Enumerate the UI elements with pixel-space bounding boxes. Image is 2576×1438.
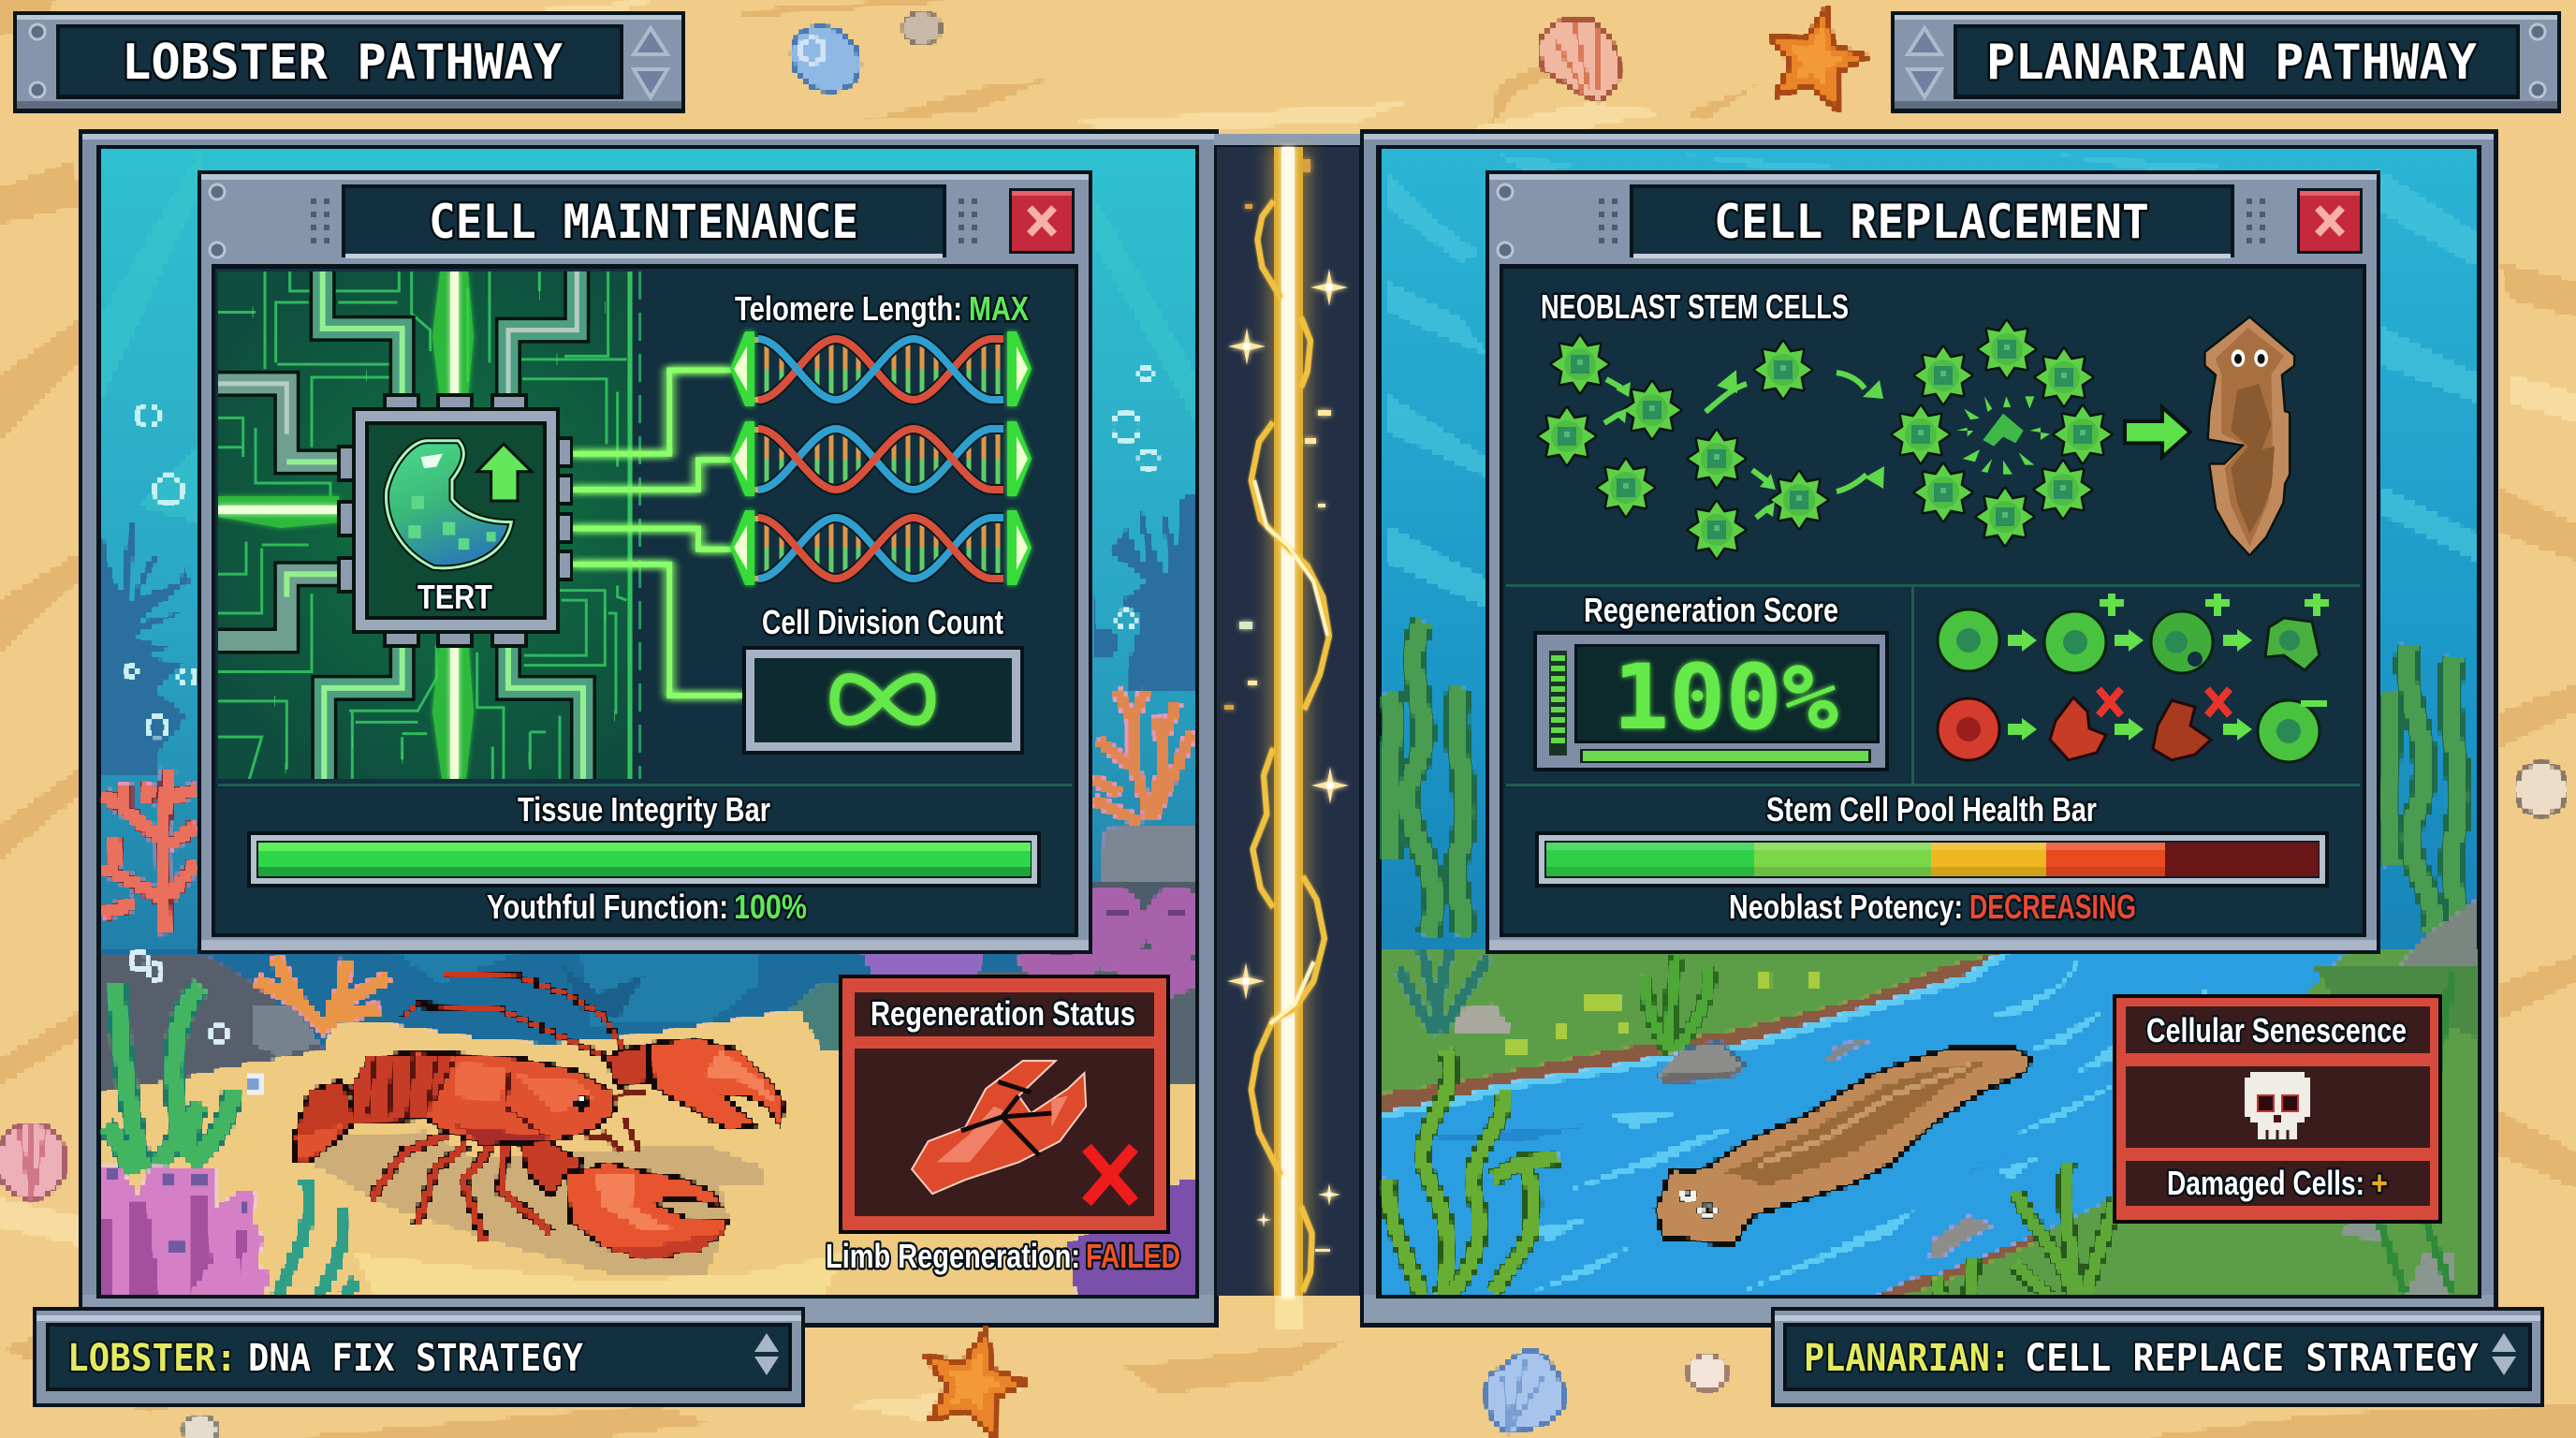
- stem cell pool health bar: [1535, 831, 2329, 888]
- window: cell replacement: [1486, 170, 2380, 954]
- seaweed sides: [1388, 621, 2459, 936]
- lightning bolt core: [1281, 147, 1295, 1299]
- water ripples: [1526, 960, 2229, 1294]
- window: cell maintenance: [198, 170, 1092, 954]
- telomere label: Telomere Length:: [735, 289, 962, 328]
- pebble: [903, 12, 941, 44]
- regeneration score display: 100%: [1613, 645, 1838, 750]
- purple coral right: [1018, 886, 1204, 1295]
- limb regeneration readout: FAILED: [1086, 1237, 1180, 1275]
- brown shore: [1380, 950, 2049, 1112]
- skull icon: [2245, 1072, 2310, 1139]
- damaged cell progression: [1938, 689, 2327, 762]
- gray rock right side: [788, 824, 1195, 1085]
- callout: cellular senescence: [2113, 994, 2442, 1224]
- pink coral: [100, 1166, 272, 1297]
- underwater background: [101, 149, 1195, 949]
- water with stripes: [1380, 149, 2478, 1295]
- starfish bottom: [912, 1317, 1036, 1438]
- regeneration score label: Regeneration Score: [1584, 591, 1838, 629]
- teal seaweed: [277, 1180, 357, 1297]
- telomere connections: [571, 370, 743, 696]
- footer: planarian strategy: PLANARIAN:: [1804, 1337, 2011, 1380]
- red coral: [103, 768, 197, 934]
- kidney icon: [387, 441, 511, 568]
- metal pipes: [218, 271, 583, 782]
- sparkles: [1224, 159, 1349, 1252]
- scroll arrows: [2492, 1333, 2516, 1375]
- header: lobster pathway: [13, 11, 685, 113]
- bank and river scene: [1380, 950, 2511, 1297]
- DNA strands: [730, 331, 1032, 585]
- footer: lobster strategy: LOBSTER:: [67, 1337, 237, 1380]
- header: lobster pathway: LOBSTER PATHWAY: [122, 35, 564, 91]
- pink scallop shell: [1540, 19, 1619, 101]
- neoblast potency readout: DECREASING: [1969, 888, 2136, 926]
- panel: lobster pathway habitat: [79, 129, 1219, 1328]
- footer: lobster strategy: [33, 1307, 805, 1407]
- rocks: [1456, 1004, 1510, 1034]
- pebble bottom left: [183, 1416, 217, 1438]
- energy beams: [218, 271, 474, 779]
- infinity display: [742, 646, 1024, 755]
- neoblast potency readout: Neoblast Potency:: [1729, 888, 1963, 926]
- up arrow: [477, 444, 532, 501]
- circuit board: [218, 271, 649, 782]
- orange coral seabed: [256, 957, 388, 1032]
- pebble bottom center: [1688, 1355, 1727, 1390]
- bubbles: [125, 368, 1158, 737]
- tissue integrity bar: [247, 831, 1041, 888]
- seaweed: [105, 981, 233, 1175]
- tissue integrity label: Tissue Integrity Bar: [518, 790, 770, 829]
- footer: planarian strategy: CELL REPLACE STRATEGY: [2025, 1337, 2479, 1380]
- broken claw icon: [912, 1061, 1086, 1194]
- damaged cells readout: Damaged Cells:: [2167, 1164, 2364, 1202]
- gray rocks left: [100, 952, 324, 1093]
- regeneration score display: [1533, 631, 1889, 771]
- red X: [1087, 1148, 1134, 1202]
- blue spiral shell: [780, 14, 871, 104]
- limb regeneration readout: Limb Regeneration:: [826, 1237, 1080, 1275]
- pink shell left: [0, 1123, 66, 1198]
- pebble right: [2516, 763, 2567, 815]
- footer: lobster strategy: DNA FIX STRATEGY: [248, 1337, 583, 1380]
- river: [1380, 950, 2347, 1297]
- sand floor: [100, 1009, 1195, 1295]
- bank plants: [1398, 950, 1488, 1034]
- center fragments: [1956, 396, 2050, 475]
- window title: CELL REPLACEMENT: [1714, 195, 2149, 249]
- healthy cell progression: [1938, 594, 2329, 673]
- header: planarian pathway: [1891, 11, 2561, 113]
- center divider with lightning: [1214, 134, 1364, 1329]
- big green arrow: [2125, 407, 2190, 457]
- blue coral silhouettes: [103, 492, 1195, 773]
- planarian in river: [1656, 1047, 2030, 1245]
- chip: TERT: [337, 393, 573, 648]
- neoblast heading: NEOBLAST STEM CELLS: [1541, 287, 1849, 326]
- seabed water: [101, 949, 1022, 1050]
- orange coral: [1092, 690, 1192, 823]
- lime water plants: [1388, 1050, 1559, 1297]
- header: planarian pathway: PLANARIAN PATHWAY: [1986, 35, 2478, 91]
- footer: planarian strategy: [1771, 1307, 2544, 1407]
- youthful function readout: Youthful Function:: [487, 888, 728, 926]
- scroll arrows: [754, 1333, 779, 1375]
- callout title: Regeneration Status: [871, 994, 1135, 1033]
- cell division count label: Cell Division Count: [762, 603, 1003, 641]
- blue scallop shell: [1486, 1350, 1565, 1432]
- youthful function readout: 100%: [734, 888, 807, 926]
- wounded planarian: [2206, 318, 2293, 554]
- rock and plants right bank: [2312, 899, 2478, 1295]
- callout: regeneration status: [839, 975, 1170, 1234]
- chip: TERT: TERT: [417, 578, 492, 616]
- panel: planarian pathway habitat: [1360, 129, 2511, 1328]
- stem cell pool label: Stem Cell Pool Health Bar: [1766, 790, 2097, 829]
- window title: CELL MAINTENANCE: [429, 195, 858, 249]
- callout title: Cellular Senescence: [2146, 1011, 2407, 1049]
- starfish top: [1759, 0, 1875, 112]
- telomere label: MAX: [969, 289, 1029, 328]
- thin traces: [218, 271, 627, 782]
- damaged cells readout: +: [2371, 1164, 2388, 1202]
- neoblast cell cluster: [1539, 321, 2111, 558]
- lobster: [293, 974, 784, 1259]
- lower bank: [1875, 1200, 2511, 1297]
